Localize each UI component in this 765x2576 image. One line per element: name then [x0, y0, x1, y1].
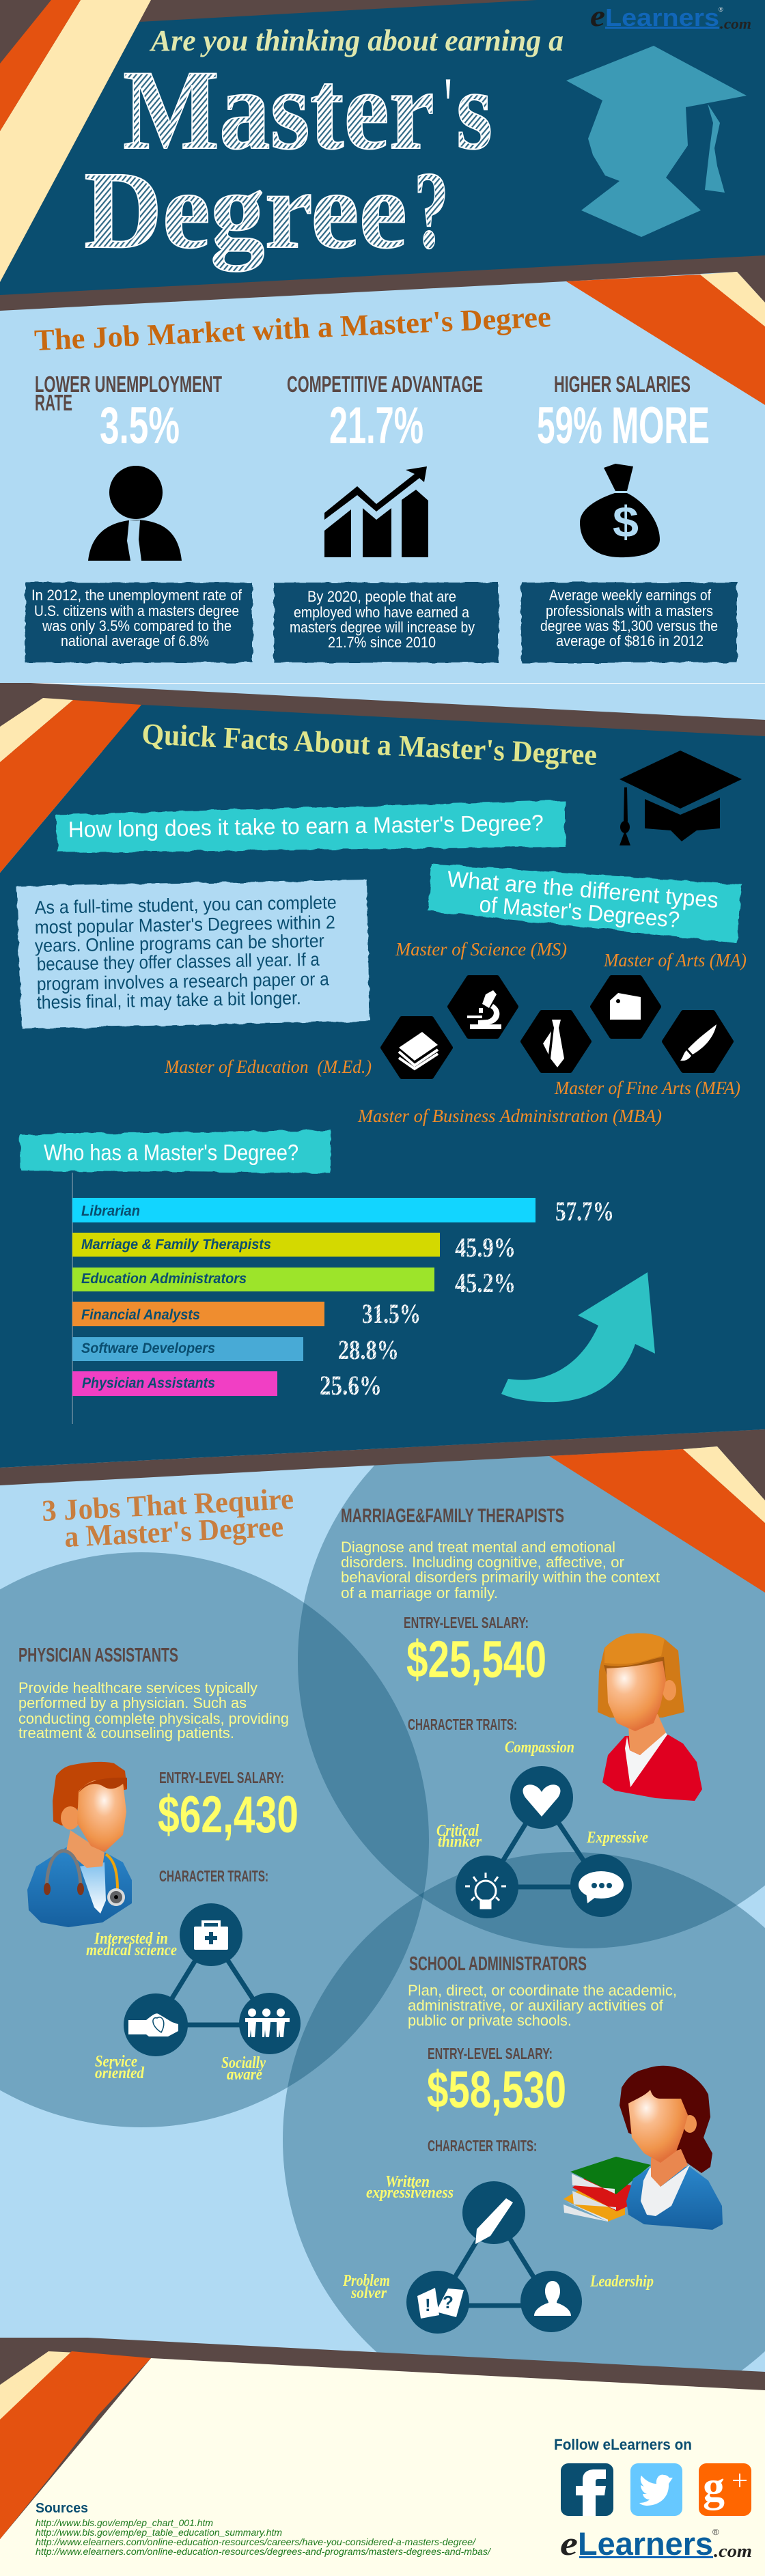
label: socially aware [221, 2054, 266, 2084]
icon: pencil [475, 2198, 513, 2244]
icon: light bulb [465, 1873, 506, 1908]
panel: school administrators: ENTRY-LEVEL SALARY: [428, 2045, 553, 2062]
callout: advantage: By 2020, people that are [307, 588, 456, 605]
text block: duration: years. Online programs can be shorter [35, 931, 324, 956]
sources: http://www.bls.gov/emp/ep_table_education_summary.htm [36, 2527, 282, 2538]
callout: unemployment: In 2012, the unemployment rate of [31, 587, 242, 604]
panel: physician assistants: ENTRY-LEVEL SALARY: [159, 1769, 284, 1787]
heading: quick facts: Quick Facts About a Master's Degree [141, 717, 598, 772]
bar: physician assistants [72, 1370, 382, 1401]
text: physician description [18, 1679, 289, 1741]
subtitle: Are you thinking about earning a [149, 24, 564, 57]
icon: facebook [561, 2463, 613, 2516]
bar: education administrators [72, 1268, 516, 1298]
bar: librarian: Librarian [81, 1203, 140, 1219]
icon: rising chart [324, 466, 428, 557]
callout: advantage [274, 583, 499, 662]
callout: salaries: professionals with a masters [546, 602, 713, 619]
sources [36, 2501, 492, 2557]
column: competitive advantage [274, 372, 499, 662]
banner: types of degrees [428, 864, 742, 943]
logo: eLearners bottom: .com [714, 2541, 752, 2561]
section 3 background circles [0, 1373, 765, 2427]
bar: software developers [72, 1334, 399, 1365]
column: lower unemployment: LOWER UNEMPLOYMENT [35, 372, 222, 397]
icon: arts hexagon [592, 977, 659, 1037]
footer background [0, 2338, 765, 2576]
banner: types of degrees: of Master's Degrees? [478, 891, 680, 932]
icon: group of people [245, 2008, 290, 2037]
callout: unemployment: U.S. citizens with a masters degree [34, 602, 239, 619]
label: compassion: Compassion [505, 1739, 574, 1756]
panel: school administrators: SCHOOL ADMINISTRATORS [409, 1953, 587, 1975]
logo: eLearners top: e [590, 0, 605, 33]
degree types [164, 939, 747, 1126]
label: Master of Science: Master of Science (MS) [395, 939, 567, 960]
icon: heart [523, 1784, 560, 1817]
icon: graduate silhouette [566, 46, 747, 237]
label: socially aware: aware [227, 2066, 262, 2084]
follow us: Follow eLearners on [554, 2436, 692, 2453]
panel: physician assistants: $62,430 [158, 1786, 298, 1844]
column: competitive advantage: COMPETITIVE ADVANTAGE [287, 372, 483, 397]
text: therapist description: disorders. Including cognitive, affective, or [341, 1554, 624, 1571]
panel: school administrators: CHARACTER TRAITS: [428, 2137, 537, 2155]
label: Master of Fine Arts: Master of Fine Arts (MFA) [554, 1078, 740, 1098]
label: interested in medical science: Interested in [94, 1930, 168, 1948]
panel: marriage and family therapists: ENTRY-LEVEL SALARY: [404, 1614, 529, 1632]
callout: advantage: employed who have earned a [294, 604, 470, 621]
heading: 3 jobs: 3 Jobs That Require [41, 1482, 294, 1528]
label: critical thinker [436, 1822, 482, 1851]
icon: administrator avatar with books [564, 2066, 723, 2230]
icon: leader [534, 2281, 571, 2316]
label: problem solver: solver [350, 2284, 387, 2302]
follow us [554, 2436, 751, 2516]
panel: marriage and family therapists [341, 1505, 702, 1918]
banner: who has [20, 1130, 331, 1173]
heading: 3 jobs: a Master's Degree [64, 1509, 284, 1554]
label: socially aware: Socially [221, 2054, 266, 2072]
icon: microscope hexagon [449, 977, 516, 1037]
callout: unemployment: was only 3.5% compared to the [42, 617, 232, 634]
logo: eLearners top [590, 0, 751, 33]
callout: advantage: 21.7% since 2010 [328, 634, 436, 651]
text: therapist description: Diagnose and treat mental and emotional [341, 1539, 615, 1556]
logo: eLearners top: Learners [605, 3, 719, 31]
banner: types of degrees: What are the different types [446, 866, 719, 912]
column: competitive advantage: 21.7% [329, 397, 423, 455]
text block: duration: most popular Master's Degrees within 2 [35, 912, 335, 938]
text: therapist description [341, 1539, 660, 1601]
panel: physician assistants [18, 1644, 301, 2084]
title: Master's: Master [123, 47, 434, 173]
bar: financial analysts: Financial Analysts [81, 1307, 200, 1323]
panel: quick facts background [0, 683, 765, 1468]
logo: eLearners bottom: ® [712, 2527, 719, 2537]
chart: physician traits [86, 1903, 301, 2084]
banner: who has: Who has a Master's Degree? [44, 1140, 298, 1165]
callout: advantage: masters degree will increase by [290, 619, 475, 636]
text: administrator description: Plan, direct, or coordinate the academic, [408, 1982, 677, 1999]
label: service oriented [95, 2053, 145, 2082]
panel: marriage and family therapists: MARRIAGE&FAMILY THERAPISTS [341, 1505, 564, 1527]
text block: duration: program involves a research paper or a [37, 969, 330, 994]
icon: therapist avatar [598, 1634, 702, 1801]
bar chart: who has a master's degree [72, 1173, 614, 1424]
text: physician description: conducting complete physicals, providing [18, 1710, 289, 1727]
bar: physician assistants: Physician Assistants [82, 1375, 215, 1391]
bar: librarian [72, 1196, 614, 1227]
title: Master's: s [456, 47, 492, 173]
label: service oriented: Service [95, 2053, 137, 2071]
label: interested in medical science [86, 1930, 177, 1959]
callout: salaries: degree was $1,300 versus the [540, 617, 718, 634]
bar: software developers: Software Developers [81, 1341, 215, 1356]
icon: question cards: ? [443, 2292, 454, 2312]
panel: school administrators: $58,530 [427, 2061, 566, 2119]
bar: physician assistants: 25.6% [320, 1370, 382, 1401]
sources: http://www.elearners.com/online-education-resources/careers/have-you-considered-a-masters-degree/ [36, 2536, 477, 2547]
title: Degree?: Degree [84, 150, 407, 272]
title: Degree?: ? [414, 150, 449, 272]
chart: therapist traits [436, 1739, 648, 1918]
text: physician description: performed by a physician. Such as [18, 1694, 247, 1711]
label: critical thinker: thinker [438, 1833, 482, 1851]
callout: salaries: average of $816 in 2012 [556, 632, 704, 649]
column: lower unemployment: RATE [35, 390, 72, 415]
icon: question cards [417, 2288, 464, 2319]
icon: money bag: $ [613, 497, 639, 546]
callout: unemployment [25, 583, 253, 662]
arrow: rising [501, 1272, 655, 1402]
icon: question cards: ! [425, 2295, 431, 2315]
callout: unemployment: national average of 6.8% [61, 632, 209, 649]
text: therapist description: behavioral disorders primarily within the context [341, 1569, 660, 1586]
bar: software developers: 28.8% [338, 1334, 399, 1365]
icon: twitter [630, 2463, 682, 2516]
icon: google plus: g [703, 2462, 725, 2510]
icon: person with tie [88, 466, 182, 561]
text block: duration [16, 880, 370, 1028]
icon: money bag [580, 464, 660, 557]
label: Master of Arts: Master of Arts (MA) [603, 950, 747, 970]
label: service oriented: oriented [95, 2064, 145, 2082]
text block: duration: As a full-time student, you can complete [35, 892, 337, 918]
panel: school administrators [342, 1953, 723, 2334]
logo: eLearners top: .com [720, 15, 751, 32]
panel: physician assistants: PHYSICIAN ASSISTANTS [18, 1644, 178, 1666]
panel: physician assistants: CHARACTER TRAITS: [159, 1867, 268, 1885]
label: Master of Business Administration: Master of Business Administration (MBA) [357, 1106, 662, 1126]
callout: salaries [521, 583, 737, 662]
panel: marriage and family therapists: $25,540 [406, 1631, 546, 1689]
column: lower unemployment [25, 372, 253, 662]
icon: medical kit [194, 1922, 228, 1950]
title: Master's: ' [443, 60, 453, 151]
label: problem solver: Problem [342, 2272, 390, 2290]
panel: marriage and family therapists: CHARACTER TRAITS: [408, 1716, 517, 1733]
bar: financial analysts [72, 1298, 421, 1329]
header banner [0, 0, 765, 405]
logo: eLearners top: ® [719, 6, 723, 13]
text: physician description: Provide healthcare services typically [18, 1679, 258, 1696]
chart: administrator traits [342, 2173, 654, 2334]
bar: librarian: 57.7% [555, 1196, 614, 1227]
column: higher salaries: HIGHER SALARIES [554, 372, 691, 397]
sources: Sources [36, 2501, 88, 2516]
text block: duration: because they offer classes all year. If a [37, 949, 320, 975]
logo: eLearners bottom: e [560, 2524, 578, 2562]
heading: 3 jobs [41, 1482, 294, 1554]
text: administrator description: administrative, or auxiliary activities of [408, 1997, 664, 2014]
label: written expressiveness: expressiveness [366, 2184, 454, 2202]
bar: marriage and family therapists: 45.9% [455, 1232, 516, 1263]
divider line [0, 683, 765, 684]
label: written expressiveness: Written [385, 2173, 430, 2191]
text: administrator description [408, 1982, 677, 2029]
heading: job market: The Job Market with a Master's Degree [33, 300, 552, 357]
label: leadership: Leadership [589, 2273, 654, 2291]
text: administrator description: public or private schools. [408, 2012, 572, 2029]
banner: how long: How long does it take to earn a Master's Degree? [68, 810, 544, 842]
label: critical thinker: Critical [436, 1822, 479, 1840]
icon: brush hexagon [664, 1012, 732, 1071]
panel: job market [25, 300, 737, 662]
icon: graduation cap [620, 751, 742, 845]
bar: marriage and family therapists: Marriage & Family Therapists [81, 1237, 271, 1252]
icon: helping hand [128, 2013, 178, 2036]
logo: eLearners bottom: Learners [578, 2525, 713, 2562]
bar: education administrators: Education Administrators [81, 1271, 247, 1287]
text: physician description: treatment & counseling patients. [18, 1724, 234, 1741]
sources: http://www.bls.gov/emp/ep_chart_001.htm [36, 2517, 213, 2528]
icon: doctor avatar [27, 1762, 132, 1927]
label: interested in medical science: medical science [86, 1942, 177, 1959]
bar: marriage and family therapists [72, 1232, 516, 1263]
label: Master of Education: Master of Education (M.Ed.) [164, 1056, 372, 1077]
bar: financial analysts: 31.5% [362, 1298, 421, 1329]
banner: how long [56, 800, 565, 852]
icon: tie hexagon [523, 1012, 589, 1071]
label: written expressiveness [366, 2173, 454, 2202]
text block: duration: thesis final, it may take a bit longer. [37, 988, 301, 1013]
bar: education administrators: 45.2% [455, 1268, 516, 1298]
icon: books hexagon [382, 1018, 451, 1077]
bottom band of quick facts [0, 1429, 765, 1593]
label: problem solver [342, 2272, 390, 2302]
text: therapist description: of a marriage or family. [341, 1584, 498, 1601]
sources: http://www.elearners.com/online-education-resources/degrees-and-programs/masters-degrees-and-mbas/ [36, 2546, 492, 2557]
logo: eLearners bottom [560, 2524, 752, 2562]
label: expressive: Expressive [586, 1829, 648, 1847]
icon: speech bubble [579, 1871, 624, 1903]
column: lower unemployment: 3.5% [100, 397, 180, 455]
column: higher salaries [521, 372, 737, 662]
icon: google plus [699, 2462, 751, 2516]
callout: salaries: Average weekly earnings of [549, 587, 712, 604]
